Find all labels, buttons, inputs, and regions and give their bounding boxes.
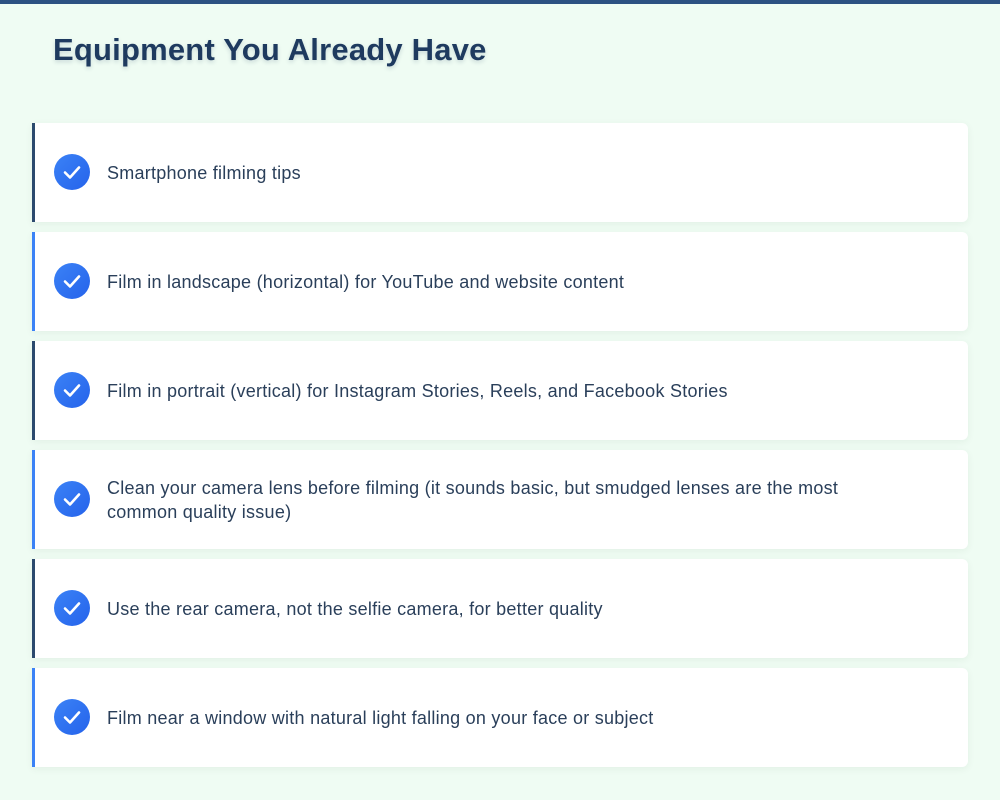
text: Film in landscape (horizontal) for YouTube and website content [107, 272, 624, 292]
icon: check [54, 372, 90, 408]
card: window light [32, 668, 968, 767]
text: Clean your camera lens before filming (it sounds basic, but smudged lenses are the most common quality issue) [107, 478, 838, 522]
text: Use the rear camera, not the selfie camera, for better quality [107, 598, 603, 618]
top bar [0, 0, 1000, 4]
icon: check [54, 263, 90, 299]
icon: check [54, 590, 90, 626]
card: rear camera [32, 559, 968, 658]
text: Film in portrait (vertical) for Instagram Stories, Reels, and Facebook Stories [107, 380, 728, 400]
card: smartphone tips [32, 123, 968, 222]
text: Film near a window with natural light falling on your face or subject [107, 708, 654, 728]
text: Smartphone filming tips [107, 162, 301, 182]
icon: check [54, 699, 90, 735]
card: portrait [32, 341, 968, 440]
card: landscape [32, 232, 968, 331]
icon: check [54, 481, 90, 517]
title: Equipment You Already Have [53, 32, 487, 67]
card: clean lens [32, 450, 968, 549]
icon: check [54, 154, 90, 190]
